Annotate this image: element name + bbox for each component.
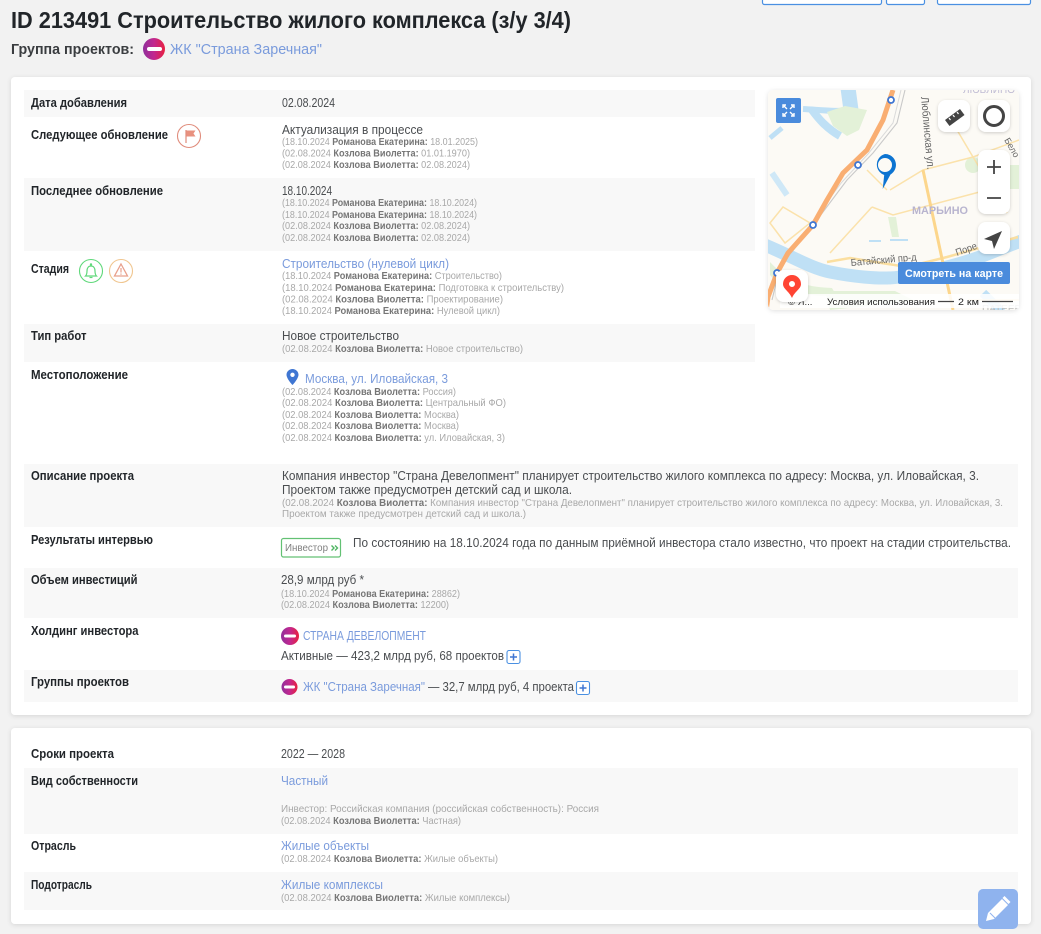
row: investment volume xyxy=(31,573,460,611)
icon: holding logo xyxy=(281,627,299,645)
map labels: Люблинская ул. xyxy=(918,96,936,170)
row: last update: (02.08.2024 Козлова Виолетта: 02.08.2024) xyxy=(282,220,470,232)
row: investor holding: Активные — 423,2 млрд руб, 68 проектов xyxy=(281,649,504,663)
row: location: Местоположение xyxy=(31,368,128,382)
map: ЛЮБЛИНО xyxy=(963,85,1015,96)
row: project description: Компания инвестор "Страна Девелопмент" планирует строительство жилого комплекса по адресу: Москва, ул. Иловайская, 3. xyxy=(282,469,979,483)
row: date added: Дата добавления xyxy=(31,96,127,110)
project group heading xyxy=(11,38,322,60)
map: ПАТЕЕВ xyxy=(982,304,1022,315)
row: location: Москва, ул. Иловайская, 3 xyxy=(305,372,448,386)
panel: project details xyxy=(11,77,1031,715)
button: fullscreen xyxy=(776,98,801,123)
row: investor holding: Холдинг инвестора xyxy=(31,624,139,638)
row: ownership type: Вид собственности xyxy=(31,774,138,788)
icon: plus button xyxy=(507,650,520,664)
row: sub-industry: (02.08.2024 Козлова Виолетта: Жилые комплексы) xyxy=(281,892,510,904)
group link: ЖК "Страна Заречная" xyxy=(170,42,322,58)
metro stations xyxy=(774,97,894,276)
row: investor holding: СТРАНА ДЕВЕЛОПМЕНТ xyxy=(303,629,426,643)
row: date added xyxy=(31,96,335,110)
row: date added: 02.08.2024 xyxy=(282,96,335,110)
row: project timeline: 2022 — 2028 xyxy=(281,747,345,761)
row: sub-industry xyxy=(31,878,510,904)
row: location: (02.08.2024 Козлова Виолетта: Москва) xyxy=(282,420,459,432)
icon: plus button xyxy=(576,682,590,694)
map: МАРЬИНО xyxy=(912,205,968,217)
row: location: (02.08.2024 Козлова Виолетта: ул. Иловайская, 3) xyxy=(282,432,505,444)
investor badge: Инвестор xyxy=(285,543,328,554)
row: location: (02.08.2024 Козлова Виолетта: Россия) xyxy=(282,386,456,398)
button: edit xyxy=(978,889,1018,929)
row: last update: (18.10.2024 Романова Екатерина: 18.10.2024) xyxy=(282,209,477,221)
row: ownership type: Инвестор: Российская компания (российская собственность): Россия xyxy=(281,803,599,815)
row: location: (02.08.2024 Козлова Виолетта: Центральный ФО) xyxy=(282,397,506,409)
project group heading: Группа проектов: xyxy=(11,42,134,58)
map: Бело xyxy=(1002,136,1021,159)
button: geolocation xyxy=(978,222,1010,254)
row: stage: (18.10.2024 Романова Екатерина: Подготовка к строительству) xyxy=(282,282,564,294)
row: next update xyxy=(31,123,478,171)
map attribution bar: 2 км xyxy=(958,297,979,308)
row: interview results: Результаты интервью xyxy=(31,533,153,547)
row: ownership type: Частный xyxy=(281,774,328,788)
row: industry: Отрасль xyxy=(31,839,76,853)
icon: group logo xyxy=(282,679,298,695)
icon: location pin xyxy=(286,369,298,385)
row: industry: Жилые объекты xyxy=(281,839,369,853)
row: investment volume: Объем инвестиций xyxy=(31,573,138,587)
row: project groups: — 32,7 млрд руб, 4 проекта xyxy=(428,680,574,694)
row: project description: Описание проекта xyxy=(31,469,135,483)
row: work type: (02.08.2024 Козлова Виолетта: Новое строительство) xyxy=(282,343,523,355)
row: investor holding xyxy=(31,624,520,664)
top action buttons xyxy=(762,0,1030,4)
row: stage xyxy=(31,257,564,317)
row: stage: (02.08.2024 Козлова Виолетта: Проектирование) xyxy=(282,294,503,306)
row: ownership type: (02.08.2024 Козлова Виолетта: Частная) xyxy=(281,815,461,827)
row: project timeline: Сроки проекта xyxy=(31,747,115,761)
row: stage: Строительство (нулевой цикл) xyxy=(282,257,449,271)
row: work type: Тип работ xyxy=(31,329,86,343)
row: last update: 18.10.2024 xyxy=(282,184,332,198)
icon: map marker xyxy=(877,154,896,189)
row: project description xyxy=(31,469,1003,520)
button: ruler xyxy=(938,100,970,132)
button: view on map: Смотреть на карте xyxy=(905,268,1003,280)
row: last update: Последнее обновление xyxy=(31,184,163,198)
button: view on map xyxy=(898,262,1010,284)
row: investment volume: (18.10.2024 Романова Екатерина: 28862) xyxy=(281,588,460,600)
railway xyxy=(772,90,905,300)
water xyxy=(760,88,1030,312)
row: last update: (18.10.2024 Романова Екатерина: 18.10.2024) xyxy=(282,197,477,209)
row: last update xyxy=(31,184,477,244)
row: project timeline xyxy=(31,747,345,761)
row: location xyxy=(31,368,506,444)
row: next update: Следующее обновление xyxy=(31,128,168,142)
row: next update: (18.10.2024 Романова Екатерина: 18.01.2025) xyxy=(282,136,478,148)
button: yandex logo xyxy=(776,270,808,302)
row: investment volume: 28,9 млрд руб * xyxy=(281,573,364,587)
map attribution bar xyxy=(780,294,1019,308)
row: project description: Проектом также предусмотрен детский сад и школа.) xyxy=(282,508,526,520)
row: next update: Актуализация в процессе xyxy=(282,123,423,137)
map: Батайский пр-д xyxy=(850,252,917,269)
parks xyxy=(770,106,1019,310)
row: project groups: Группы проектов xyxy=(31,675,129,689)
row: project groups xyxy=(31,675,590,695)
row: sub-industry: Подотрасль xyxy=(31,878,92,892)
row: ownership type xyxy=(31,774,599,827)
row: stage: (18.10.2024 Романова Екатерина: Нулевой цикл) xyxy=(282,305,500,317)
row: project groups: ЖК "Страна Заречная" xyxy=(303,680,425,694)
icon: group logo xyxy=(143,38,165,60)
row: interview results xyxy=(31,533,1011,557)
row: project description: Проектом также предусмотрен детский сад и школа. xyxy=(282,483,572,497)
row: location: (02.08.2024 Козлова Виолетта: Москва) xyxy=(282,409,459,421)
title: ID 213491 Строительство жилого комплекса (з/у 3/4) xyxy=(11,7,571,33)
row: interview results: По состоянию на 18.10.2024 года по данным приёмной инвестора стало известно, что проект на стадии строительства. xyxy=(353,536,1011,550)
row: last update: (02.08.2024 Козлова Виолетта: 02.08.2024) xyxy=(282,232,470,244)
row: stage: Стадия xyxy=(31,262,69,276)
map attribution bar: © Я... xyxy=(788,297,812,308)
map: Поре xyxy=(954,241,979,259)
button: area xyxy=(978,100,1010,132)
row: industry: (02.08.2024 Козлова Виолетта: Жилые объекты) xyxy=(281,853,498,865)
map attribution bar: Условия использования xyxy=(827,297,935,308)
map xyxy=(760,85,1030,315)
panel: project attributes xyxy=(11,728,1031,924)
icon: warning xyxy=(110,260,132,282)
row: stage: (18.10.2024 Романова Екатерина: Строительство) xyxy=(282,270,502,282)
highway xyxy=(766,90,893,312)
row: investment volume: (02.08.2024 Козлова Виолетта: 12200) xyxy=(281,599,449,611)
button: zoom xyxy=(978,150,1010,214)
minor roads xyxy=(770,130,1019,300)
row: next update: (02.08.2024 Козлова Виолетта: 01.01.1970) xyxy=(282,148,470,160)
Lublinskaya street xyxy=(923,170,953,310)
row: industry xyxy=(31,839,498,865)
row: next update: (02.08.2024 Козлова Виолетта: 02.08.2024) xyxy=(282,159,470,171)
row: work type: Новое строительство xyxy=(282,329,399,343)
icon: flag xyxy=(178,124,200,148)
row: work type xyxy=(31,329,523,355)
investor badge xyxy=(282,538,340,557)
row: project description: (02.08.2024 Козлова Виолетта: Компания инвестор "Страна Девелопмент" планирует строительство жилого комплекса по адресу: Москва, ул. Иловайская, 3. xyxy=(282,497,1003,509)
row: sub-industry: Жилые комплексы xyxy=(281,878,383,892)
icon: bell xyxy=(80,260,102,282)
